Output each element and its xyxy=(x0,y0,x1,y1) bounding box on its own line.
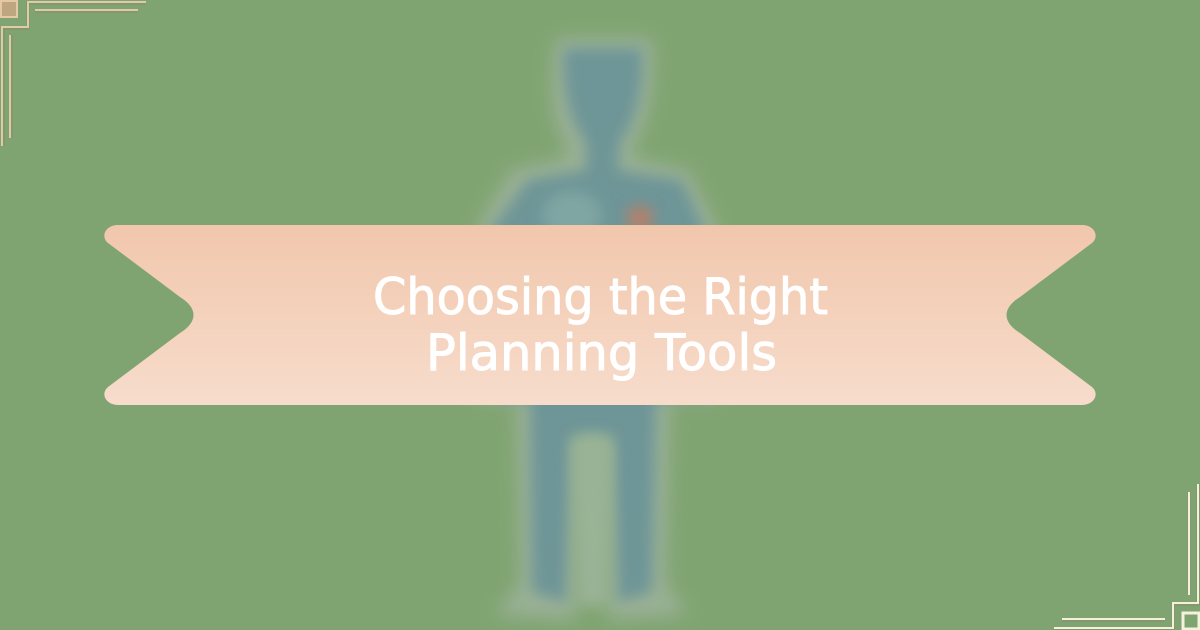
title: Planning Tools xyxy=(426,324,777,382)
ribbon banner xyxy=(104,225,1096,405)
blurred human figure xyxy=(478,38,716,620)
corner ornament: top left xyxy=(1,1,146,146)
figure leg gap xyxy=(572,434,612,606)
title: Choosing the Right xyxy=(373,268,828,326)
corner ornament: bottom right xyxy=(1054,484,1199,629)
figure chest highlight xyxy=(542,191,602,239)
figure heart xyxy=(627,206,653,230)
